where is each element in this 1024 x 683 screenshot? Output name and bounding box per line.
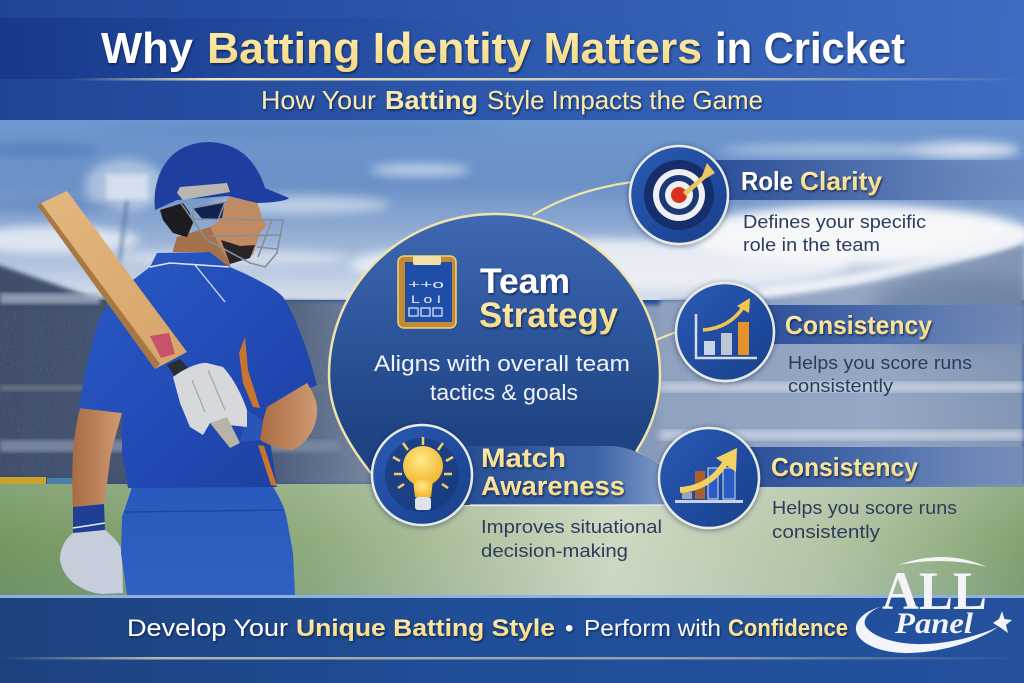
logo: all panel [856,557,1012,653]
panel: role clarity [630,146,1024,255]
heading: role clarity: Role [741,166,793,196]
connector lines [533,182,676,465]
icon: clipboard: ++o [408,279,444,291]
heading: team strategy: Team [480,262,570,301]
head and face [160,197,267,264]
icon: light bulb [372,425,472,525]
icon: bar chart with curved arrow [676,283,774,381]
footer banner [0,557,1024,683]
heading: team strategy: Strategy [479,296,619,335]
heading: team strategy [479,262,619,335]
role clarity description: Defines your specific [743,212,926,232]
band [760,305,1024,344]
footer text: Unique Batting Style [296,615,555,642]
helmet [155,142,289,210]
logo: all panel: Panel [894,607,974,640]
role clarity description [743,212,926,255]
panel: match awareness [372,425,665,561]
bat [37,191,190,377]
right arm [260,383,317,450]
consistency description [772,498,957,542]
batting glove [173,363,247,448]
title [101,24,905,73]
consistency description: Helps you score runs [772,498,957,518]
panel: team strategy [329,214,660,505]
footer text [127,615,848,642]
background: stadium scene [0,120,1024,598]
title: Why [101,24,194,73]
icon: rising bars with arrow [659,428,759,528]
helmet grille [180,202,283,267]
consistency description: consistently [788,376,893,396]
footer text: Perform with [584,615,721,641]
team strategy description: Aligns with overall team [374,351,630,376]
left glove [60,530,123,594]
match awareness description: decision-making [481,541,628,561]
subtitle: How Your [261,85,376,115]
footer text: • [565,615,573,642]
heading: match awareness [481,443,625,501]
team strategy description [374,351,630,405]
heading: match awareness: Awareness [481,471,625,501]
consistency description: Helps you score runs [788,353,972,373]
team strategy description: tactics & goals [430,380,578,405]
heading: consistency: Consistency [771,452,919,482]
band [440,446,665,505]
icon: target [630,146,728,244]
icon: clipboard [398,256,456,328]
panel: consistency 1 [676,283,1024,396]
right wristband [240,410,262,442]
footer text: Confidence [728,615,848,642]
heading: role clarity: Clarity [800,166,883,196]
heading: consistency: Consistency [785,310,933,340]
title: in Cricket [715,24,905,73]
heading: match awareness: Match [481,443,566,473]
logo: all panel: ALL [882,561,987,621]
subtitle: Batting [385,85,478,115]
right stand [660,232,1024,495]
left stand [0,262,680,488]
role clarity description: role in the team [743,235,880,255]
match awareness description [481,517,662,561]
header banner [0,0,1024,120]
left wristband [73,504,105,535]
consistency description [788,353,972,396]
title: Batting Identity Matters [207,24,702,73]
subtitle [261,85,763,115]
subtitle: Style Impacts the Game [487,85,763,115]
icon: clipboard: L o I [411,294,441,306]
footer text: Develop Your [127,615,288,642]
band [715,160,1024,200]
player [37,142,317,595]
consistency description: consistently [772,522,880,542]
band [750,447,1024,487]
panel: consistency 2 [659,428,1024,542]
orange stripe [239,337,260,408]
left arm [72,408,122,509]
shirt [78,252,317,488]
shorts [121,487,295,595]
neck [173,227,230,268]
match awareness description: Improves situational [481,517,662,537]
floodlight [106,174,148,262]
heading: role clarity [741,166,883,196]
